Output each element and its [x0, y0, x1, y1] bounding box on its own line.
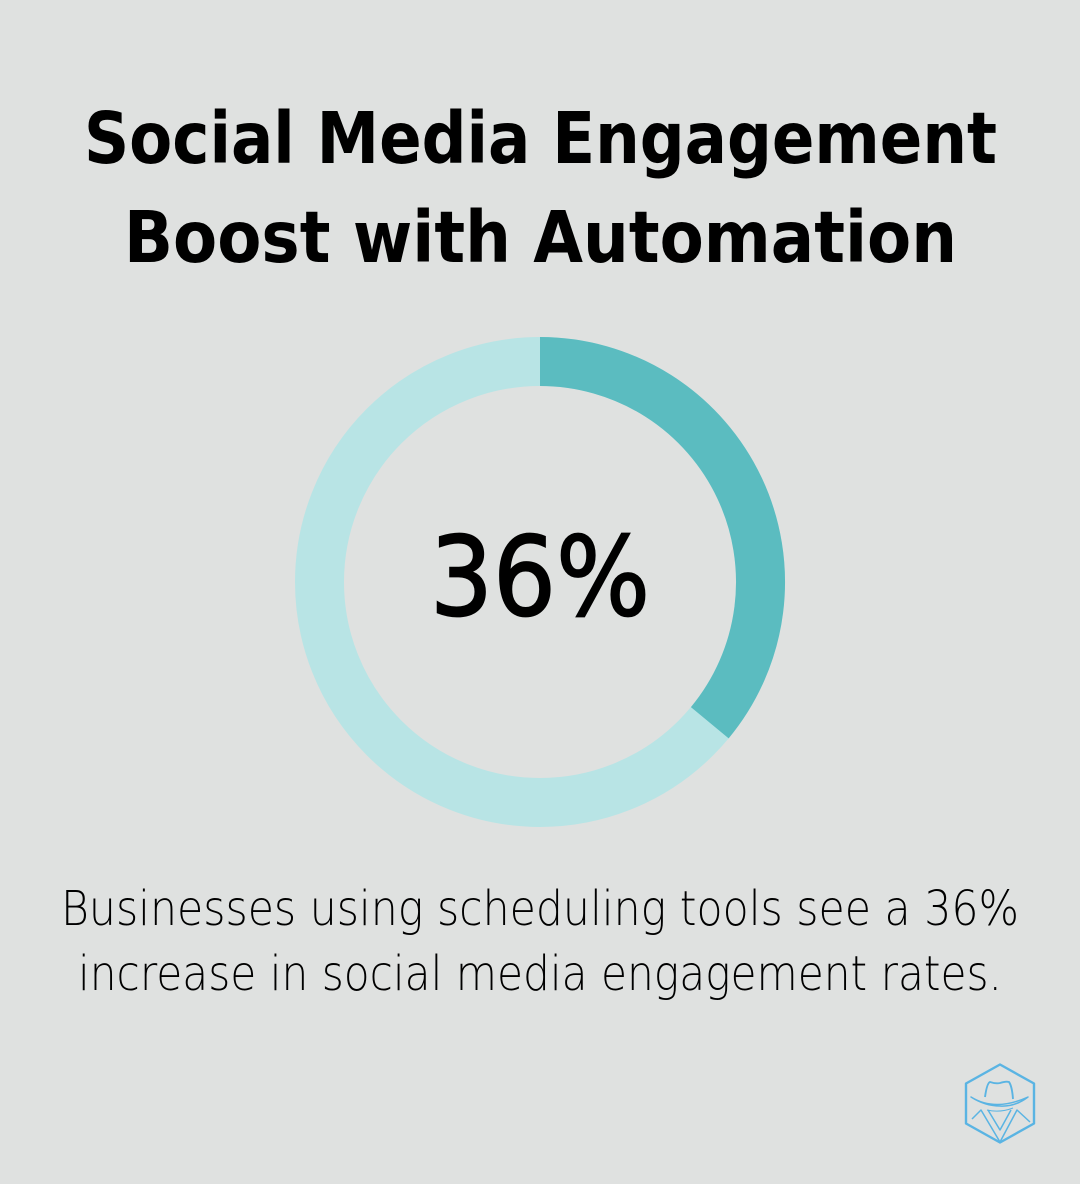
title: Boost with Automation: [124, 196, 957, 279]
title: [84, 97, 997, 279]
icon: hexagon logo with hat: [966, 1064, 1034, 1142]
description text: [61, 881, 1019, 1002]
donut value segment: 36%: [540, 362, 761, 723]
donut chart: [320, 362, 761, 802]
donut track: [320, 362, 760, 802]
center percentage: 36%: [430, 513, 650, 641]
